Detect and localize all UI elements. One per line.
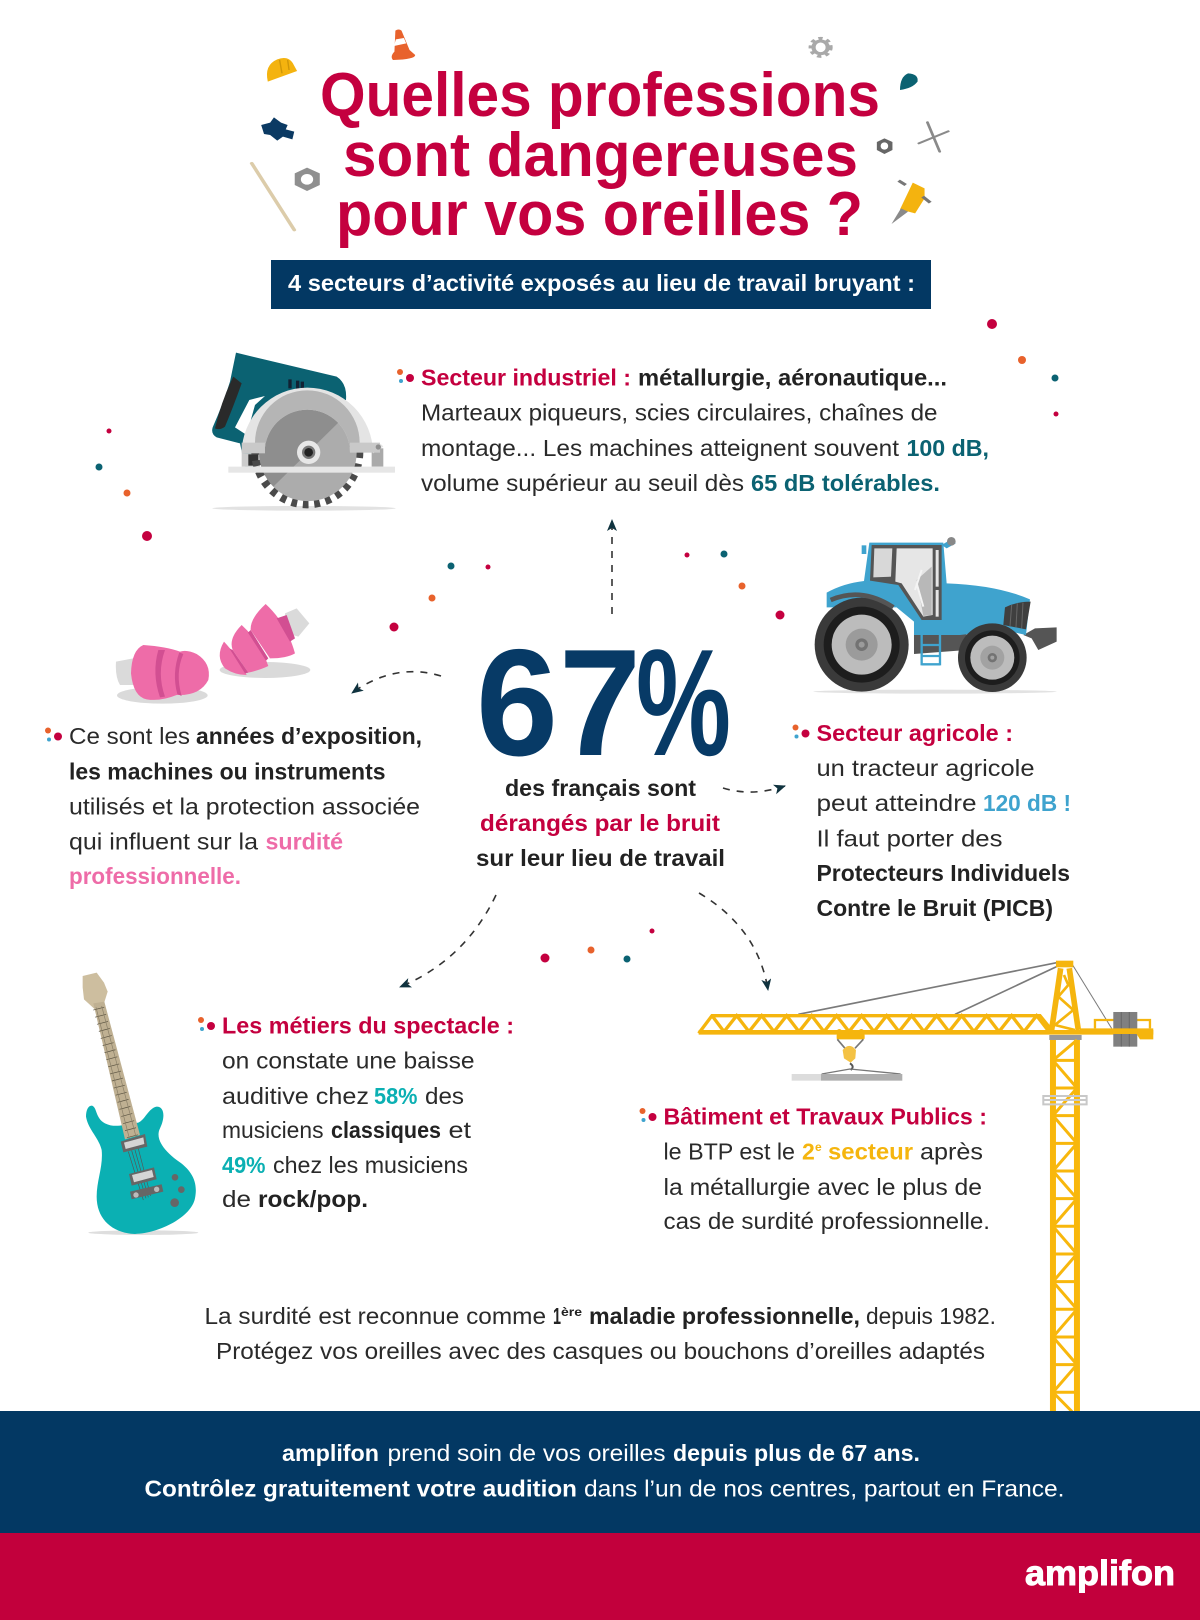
text block bbox=[421, 400, 989, 496]
title bbox=[320, 61, 880, 249]
panel: exposure note bbox=[45, 723, 422, 889]
caption bbox=[476, 775, 725, 871]
crane mast bbox=[1053, 1040, 1077, 1417]
icon: teal drop bbox=[900, 73, 918, 90]
panel: centre statistic bbox=[476, 618, 731, 871]
icon: tractor bbox=[813, 537, 1057, 694]
banner bbox=[271, 260, 931, 309]
text block: Contre le Bruit (PICB) bbox=[816, 895, 1053, 921]
crane ties bbox=[798, 963, 1057, 1014]
big number: 6 bbox=[476, 618, 558, 788]
icon: wooden stick bbox=[252, 163, 294, 230]
text block: musiciens bbox=[222, 1117, 324, 1143]
big number: 7 bbox=[559, 618, 641, 788]
crane jib bbox=[699, 1016, 1153, 1033]
text block: 100 dB, bbox=[906, 435, 989, 461]
text block: 58% bbox=[374, 1083, 418, 1109]
title decorations bbox=[252, 29, 948, 230]
icon: guitar bbox=[83, 973, 198, 1235]
icon: bullet dots bbox=[198, 1017, 215, 1031]
decorative dots bbox=[96, 319, 1058, 962]
icon: small nut bbox=[877, 138, 892, 154]
text block: conclusion: La surdité est reconnue comme bbox=[204, 1303, 546, 1329]
text block: conclusion: depuis 1982. bbox=[866, 1303, 996, 1329]
heading: Secteur industriel : bbox=[421, 364, 631, 390]
footer text bbox=[144, 1440, 1064, 1502]
caption: sur leur lieu de travail bbox=[476, 845, 725, 871]
icon: bullet dots bbox=[640, 1108, 656, 1122]
text block: conclusion: Protégez vos oreilles avec des casques ou bouchons d’oreilles adaptés bbox=[216, 1338, 985, 1364]
heading: Bâtiment et Travaux Publics : bbox=[664, 1104, 987, 1130]
text block: peut atteindre bbox=[816, 790, 976, 816]
text block: conclusion: maladie professionnelle, bbox=[589, 1303, 860, 1329]
icon: crossed wrench bbox=[919, 122, 948, 152]
arrows bbox=[352, 520, 785, 990]
text block: qui influent sur la bbox=[69, 828, 258, 854]
text block: 49% bbox=[222, 1152, 266, 1178]
panel: industrial sector bbox=[397, 364, 989, 496]
text block: des bbox=[425, 1083, 464, 1109]
big number: % bbox=[636, 618, 731, 788]
text block: rock/pop. bbox=[258, 1186, 368, 1212]
panel: entertainment professions bbox=[198, 1012, 514, 1212]
text block bbox=[664, 1138, 990, 1234]
icon: jackhammer bbox=[892, 181, 930, 224]
text block: années d’exposition, bbox=[196, 723, 422, 749]
icon: ear plugs bbox=[116, 604, 310, 704]
brand band bbox=[0, 1533, 1200, 1620]
text block: volume supérieur au seuil dès bbox=[421, 470, 744, 496]
crane tower head bbox=[1049, 961, 1082, 1040]
text block: de bbox=[222, 1186, 251, 1212]
arrow: up bbox=[611, 520, 613, 614]
crane hook and slab bbox=[792, 1029, 902, 1081]
text block: 2 bbox=[802, 1138, 815, 1164]
logo: amplifon bbox=[1025, 1554, 1175, 1593]
text block bbox=[816, 755, 1071, 921]
arrow: left bbox=[352, 672, 441, 693]
icon: bullet dots bbox=[45, 728, 62, 742]
text block: 65 dB tolérables. bbox=[751, 470, 940, 496]
text block: la métallurgie avec le plus de bbox=[664, 1174, 982, 1200]
icon: bullet dots bbox=[792, 724, 810, 738]
banner: 4 secteurs d’activité exposés au lieu de travail bruyant : bbox=[288, 270, 915, 296]
text block bbox=[222, 1048, 474, 1212]
arrow: bottom left bbox=[400, 895, 496, 987]
text block: Il faut porter des bbox=[816, 826, 1002, 852]
text block: conclusion bbox=[204, 1303, 996, 1364]
icon: hard hat bbox=[267, 58, 297, 82]
heading: métallurgie, aéronautique... bbox=[638, 364, 947, 390]
heading: Les métiers du spectacle : bbox=[222, 1012, 514, 1038]
arrow: bottom right bbox=[699, 893, 768, 990]
icon: bullet dots bbox=[397, 369, 414, 383]
text block: et bbox=[448, 1117, 472, 1143]
text block: surdité bbox=[266, 828, 343, 854]
panel: construction sector bbox=[640, 1104, 990, 1234]
icon: traffic cone bbox=[392, 29, 415, 60]
text block: chez les musiciens bbox=[273, 1152, 468, 1178]
title: Quelles professions bbox=[320, 61, 880, 130]
footer text: amplifon bbox=[282, 1440, 379, 1466]
text block: après bbox=[920, 1138, 983, 1164]
title: pour vos oreilles ? bbox=[336, 180, 863, 249]
icon: circular saw bbox=[212, 353, 396, 511]
text block: 120 dB ! bbox=[983, 790, 1071, 816]
footer text: depuis plus de 67 ans. bbox=[673, 1440, 920, 1466]
icon: grey nut bbox=[295, 168, 320, 191]
panel: agricultural sector bbox=[792, 720, 1071, 921]
footer text: dans l’un de nos centres, partout en France. bbox=[584, 1476, 1064, 1502]
footer text: Contrôlez gratuitement votre audition bbox=[144, 1476, 577, 1502]
text block: Marteaux piqueurs, scies circulaires, chaînes de bbox=[421, 400, 938, 426]
text block: classiques bbox=[331, 1117, 441, 1143]
text block: e bbox=[815, 1140, 822, 1154]
text block: utilisés et la protection associée bbox=[69, 794, 420, 820]
text block: professionnelle. bbox=[69, 863, 241, 889]
text block: le BTP est le bbox=[664, 1138, 795, 1164]
heading: Secteur agricole : bbox=[816, 720, 1013, 746]
text block: cas de surdité professionnelle. bbox=[664, 1208, 990, 1234]
text block: secteur bbox=[828, 1138, 913, 1164]
text block bbox=[69, 723, 422, 889]
big number bbox=[476, 618, 731, 788]
arrow: right bbox=[723, 786, 785, 792]
crane counter jib bbox=[1080, 1012, 1153, 1047]
icon: tower crane bbox=[699, 961, 1153, 1417]
text block: Ce sont les bbox=[69, 723, 190, 749]
text block: montage... Les machines atteignent souvent bbox=[421, 435, 900, 461]
footer text: prend soin de vos oreilles bbox=[388, 1440, 666, 1466]
text block: conclusion: ère bbox=[561, 1305, 582, 1319]
text block: les machines ou instruments bbox=[69, 758, 386, 784]
text block: auditive chez bbox=[222, 1083, 369, 1109]
icon: navy leaf bbox=[261, 117, 294, 141]
text block: on constate une baisse bbox=[222, 1048, 474, 1074]
heading bbox=[421, 364, 947, 390]
caption: des français sont bbox=[505, 775, 696, 801]
text block: conclusion: 1 bbox=[553, 1303, 561, 1329]
icon: gear bbox=[811, 38, 831, 56]
crane platform bbox=[1043, 1096, 1087, 1104]
caption: dérangés par le bruit bbox=[480, 810, 720, 836]
text block: Protecteurs Individuels bbox=[816, 860, 1070, 886]
footer band bbox=[0, 1411, 1200, 1533]
title: sont dangereuses bbox=[343, 121, 858, 190]
text block: un tracteur agricole bbox=[816, 755, 1034, 781]
